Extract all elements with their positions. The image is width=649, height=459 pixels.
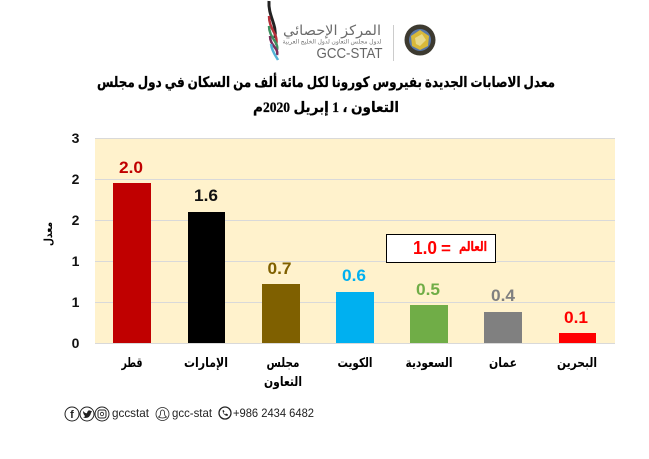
- gridlines: [95, 138, 615, 344]
- icon: facebook: f: [70, 409, 74, 421]
- callout: world average: [386, 234, 496, 262]
- chart: bar chart: [43, 130, 615, 389]
- icon: logo ribbons: [269, 1, 278, 60]
- handle: gccstat: gccstat: [112, 406, 150, 420]
- bar: Qatar: 2.0: [119, 158, 143, 177]
- icon: twitter: [80, 407, 94, 421]
- plot background: [95, 138, 615, 343]
- bar: Qatar: قطر: [121, 355, 142, 370]
- title: معدل الاصابات الجديدة بفيروس كورونا لكل مائة ألف من السكان في دول مجلس: [97, 73, 555, 91]
- bar: Kuwait: الكويت: [338, 355, 372, 370]
- bar: Kuwait: 0.6: [342, 266, 366, 285]
- bar: UAE: [184, 186, 228, 370]
- bar: Saudi Arabia: 0.5: [416, 280, 440, 299]
- icon: facebook: [65, 407, 79, 421]
- logo: GCC-STAT: [269, 1, 436, 62]
- bar: GCC: [262, 259, 302, 389]
- callout: world average: العالم: [459, 239, 487, 254]
- bar: GCC: 0.7: [268, 259, 292, 278]
- callout: world average: =: [441, 239, 451, 258]
- bar: Bahrain: 0.1: [564, 308, 588, 327]
- y axis labels: 1: [72, 294, 80, 310]
- phone number: +986 2434 6482: [233, 406, 314, 420]
- footer: social contacts: [65, 406, 314, 421]
- y axis labels: 1: [72, 253, 80, 269]
- logo text: GCC-STAT: GCC-STAT: [316, 46, 383, 62]
- bar: Oman: 0.4: [491, 286, 516, 305]
- divider: [393, 25, 394, 61]
- bar: UAE: الإمارات: [184, 355, 228, 370]
- callout: world average: 1.0: [413, 238, 437, 258]
- y axis labels: 2: [72, 171, 80, 187]
- bar: Bahrain: [557, 308, 597, 370]
- bar: Kuwait: [336, 266, 374, 370]
- bar: Oman: عمان: [489, 355, 517, 370]
- bar: Qatar: [113, 158, 151, 370]
- icon: snapchat: [156, 408, 169, 420]
- bar: GCC: مجلس: [266, 355, 300, 370]
- bar: Saudi Arabia: السعودية: [406, 355, 452, 370]
- bar: Saudi Arabia: [406, 280, 452, 370]
- bar: GCC: التعاون: [264, 374, 302, 389]
- y axis labels: [72, 130, 80, 351]
- y axis labels: 3: [72, 130, 80, 146]
- title: [97, 73, 555, 116]
- logo text: arabic subtitle: لدول مجلس التعاون لدول الخليج العربية: [282, 38, 382, 46]
- icon: whatsapp: [219, 407, 231, 419]
- bar: Oman: [484, 286, 522, 370]
- icon: instagram: [95, 407, 109, 421]
- bar: Bahrain: البحرين: [557, 355, 597, 370]
- y axis labels: 2: [72, 212, 80, 228]
- title: التعاون ، 1 إبريل 2020م: [253, 100, 399, 116]
- y axis labels: 0: [72, 335, 80, 351]
- y axis title: معدل: [43, 222, 55, 246]
- handle: gcc-stat: gcc-stat: [172, 406, 213, 420]
- bar: UAE: 1.6: [194, 186, 218, 205]
- icon: GCC emblem: [404, 24, 436, 56]
- logo text: arabic name: المركز الإحصائي: [283, 24, 381, 39]
